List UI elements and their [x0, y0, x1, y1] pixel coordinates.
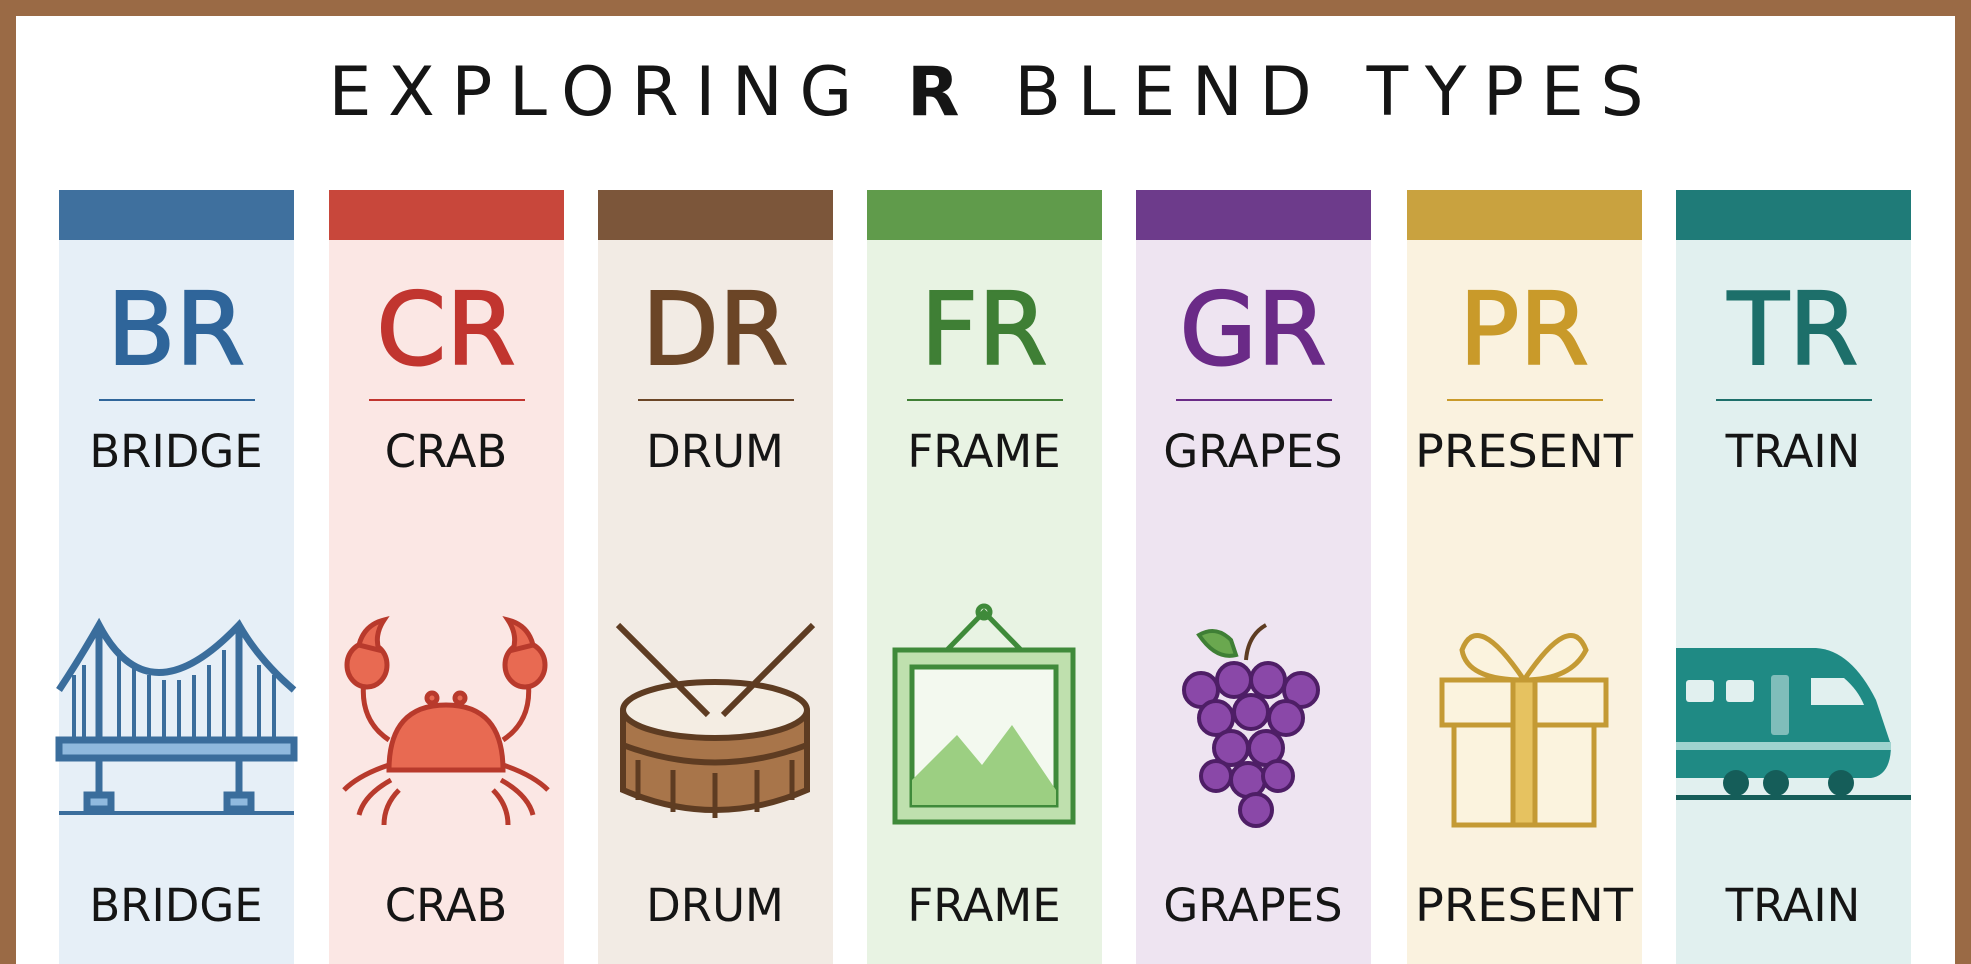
- icon: drum: [618, 625, 813, 818]
- title: EXPLORING R BLEND TYPES: [328, 53, 1644, 132]
- blend letters TR: TR: [1727, 271, 1858, 388]
- panel: TR: [1676, 190, 1911, 964]
- blend letters GR: GR: [1180, 271, 1326, 388]
- word CRAB bottom: CRAB: [385, 879, 507, 932]
- word DRUM: DRUM: [646, 425, 784, 478]
- panel: DR: [598, 190, 833, 964]
- icon: grapes: [1184, 625, 1318, 826]
- word FRAME: FRAME: [907, 425, 1061, 478]
- icon: bridge: [59, 625, 294, 813]
- panel: CR: [329, 190, 564, 964]
- panel: BR: [59, 190, 294, 964]
- word BRIDGE bottom: BRIDGE: [89, 879, 263, 932]
- word TRAIN bottom: TRAIN: [1725, 879, 1860, 932]
- blend letters FR: FR: [920, 271, 1048, 388]
- panel: GR: [1136, 190, 1371, 964]
- blend letters PR: PR: [1459, 271, 1589, 388]
- icon: frame: [895, 606, 1073, 822]
- word DRUM bottom: DRUM: [646, 879, 784, 932]
- word GRAPES bottom: GRAPES: [1163, 879, 1343, 932]
- panel: PR: [1407, 190, 1642, 964]
- word TRAIN: TRAIN: [1725, 425, 1860, 478]
- word BRIDGE: BRIDGE: [89, 425, 263, 478]
- word CRAB: CRAB: [385, 425, 507, 478]
- panel: FR: [867, 190, 1102, 964]
- icon: train: [1676, 648, 1911, 800]
- blend letters DR: DR: [642, 271, 788, 388]
- blend letters CR: CR: [376, 271, 516, 388]
- word PRESENT: PRESENT: [1415, 425, 1634, 478]
- blend letters BR: BR: [107, 271, 245, 388]
- word PRESENT bottom: PRESENT: [1415, 879, 1634, 932]
- icon: crab: [344, 620, 548, 825]
- word FRAME bottom: FRAME: [907, 879, 1061, 932]
- word GRAPES: GRAPES: [1163, 425, 1343, 478]
- icon: present: [1442, 635, 1606, 825]
